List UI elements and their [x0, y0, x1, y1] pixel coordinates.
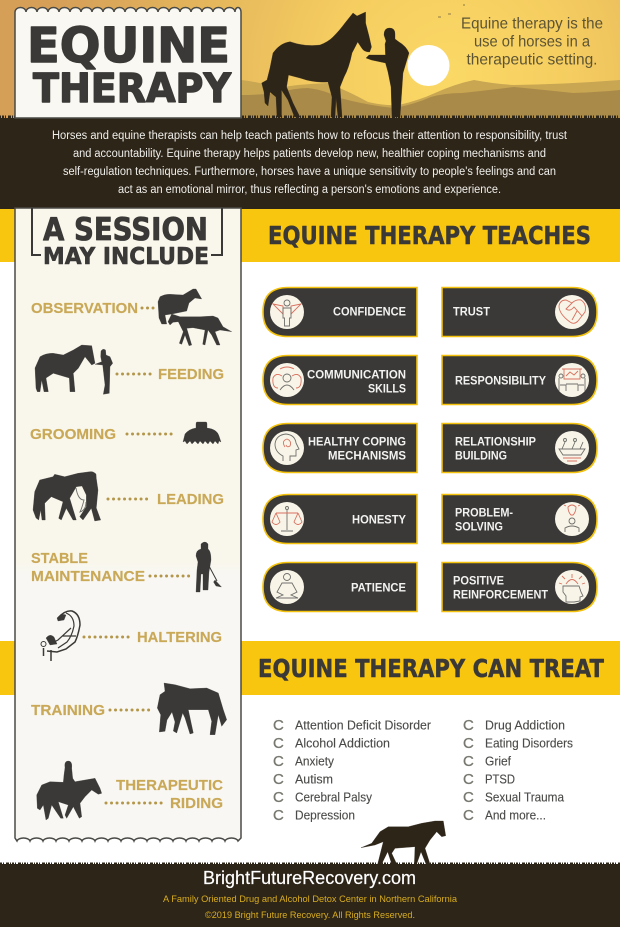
- item: feeding: [35, 345, 224, 394]
- item: grooming: GROOMING: [30, 427, 116, 443]
- header tagline: [461, 16, 603, 68]
- pill: communication skills: [263, 356, 417, 404]
- conditions list: right column: Drug Addiction: [485, 718, 565, 732]
- conditions list: right column: C: [463, 771, 474, 788]
- conditions list: left column: Attention Deficit Disorder: [295, 718, 431, 732]
- intro text band: Horses and equine therapists can help teach patients how to refocus their attention to responsibility, trust: [52, 130, 568, 142]
- pill: relationship building: [442, 424, 597, 472]
- pill: confidence: [263, 288, 417, 336]
- footer horse silhouette: [361, 821, 446, 864]
- item: haltering: [41, 611, 222, 661]
- conditions list: right column: C: [463, 789, 474, 806]
- conditions list: right column: PTSD: [485, 772, 515, 786]
- item: training: TRAINING: [31, 703, 105, 719]
- conditions list: right column: [463, 717, 573, 824]
- pill: relationship building: RELATIONSHIP: [455, 434, 536, 448]
- item: observation: [31, 289, 232, 346]
- birds: [438, 5, 465, 17]
- conditions list: left column: C: [273, 789, 284, 806]
- pill: trust: TRUST: [453, 304, 491, 318]
- pill: healthy coping mechanisms: [263, 424, 417, 472]
- pill: healthy coping mechanisms: MECHANISMS: [328, 448, 406, 462]
- item: stable maintenance: STABLE: [31, 551, 88, 567]
- pill: relationship building: BUILDING: [455, 448, 507, 462]
- item: observation: OBSERVATION: [31, 301, 138, 317]
- intro text band: [0, 117, 620, 209]
- item: leading: LEADING: [157, 492, 224, 508]
- pill: patience: [263, 562, 417, 612]
- footer band: A Family Oriented Drug and Alcohol Detox Center in Northern California: [163, 894, 458, 905]
- pill: healthy coping mechanisms: HEALTHY COPING: [308, 434, 406, 448]
- pill: responsibility: [442, 356, 597, 404]
- conditions list: left column: C: [273, 753, 284, 770]
- title card: THERAPY: [33, 66, 232, 112]
- conditions list: left column: C: [273, 717, 284, 734]
- conditions list: right column: Eating Disorders: [485, 736, 573, 750]
- pill: problem-solving: SOLVING: [455, 520, 503, 534]
- conditions list: left column: Alcohol Addiction: [295, 736, 390, 750]
- near hills: [241, 87, 620, 120]
- footer band: BrightFutureRecovery.com: [203, 868, 416, 888]
- item: stable maintenance: MAINTENANCE: [31, 569, 145, 585]
- footer band: [0, 864, 620, 927]
- conditions list: right column: C: [463, 753, 474, 770]
- item: therapeutic riding: RIDING: [170, 796, 223, 812]
- pill: trust: [442, 288, 597, 336]
- item: stable maintenance: [31, 542, 222, 592]
- panel heading: MAY INCLUDE: [43, 244, 209, 270]
- pill: honesty: HONESTY: [352, 512, 406, 526]
- header horse silhouette: [262, 12, 372, 117]
- sun: [408, 45, 450, 86]
- item: training: [31, 683, 227, 735]
- item: haltering: HALTERING: [137, 630, 222, 646]
- panel heading: [32, 208, 222, 270]
- title card: [15, 8, 241, 118]
- conditions list: right column: Grief: [485, 754, 511, 768]
- conditions list: left column: Anxiety: [295, 754, 335, 768]
- conditions list: right column: C: [463, 717, 474, 734]
- intro text band: and accountability. Equine therapy helps patients develop new, healthier coping mechanisms and: [73, 148, 546, 160]
- conditions list: left column: Cerebral Palsy: [295, 790, 373, 804]
- intro text band: act as an emotional mirror, thus reflecting a person's emotions and experience.: [118, 184, 501, 196]
- header tagline: use of horses in a: [474, 34, 590, 50]
- band: can treat heading: [0, 641, 620, 695]
- pill: communication skills: COMMUNICATION: [307, 368, 406, 382]
- conditions list: left column: Autism: [295, 772, 333, 786]
- header tagline: Equine therapy is the: [461, 16, 603, 32]
- pill: patience: PATIENCE: [351, 580, 406, 594]
- pill: problem-solving: [442, 494, 597, 544]
- header person silhouette: [366, 28, 409, 117]
- pill: responsibility: RESPONSIBILITY: [455, 374, 546, 388]
- conditions list: left column: [273, 717, 431, 824]
- item: leading: [33, 472, 224, 521]
- pill: confidence: CONFIDENCE: [333, 304, 406, 318]
- conditions list: left column: Depression: [295, 808, 355, 822]
- pill: honesty: [263, 494, 417, 544]
- conditions list: right column: Sexual Trauma: [485, 790, 564, 804]
- conditions list: left column: C: [273, 735, 284, 752]
- conditions list: left column: C: [273, 807, 284, 824]
- item: therapeutic riding: THERAPEUTIC: [116, 778, 224, 794]
- pill: communication skills: SKILLS: [368, 382, 406, 396]
- header sunset scene: [0, 0, 620, 120]
- conditions list: left column: C: [273, 771, 284, 788]
- title card: EQUINE: [27, 18, 230, 74]
- conditions list: right column: C: [463, 735, 474, 752]
- pill: problem-solving: PROBLEM-: [455, 506, 513, 520]
- far hills: [241, 80, 620, 120]
- item: grooming: [30, 422, 221, 444]
- panel heading: A SESSION: [43, 212, 208, 248]
- intro text band: self-regulation techniques. Furthermore, horses have a unique sensitivity to people's feelings and can: [63, 166, 556, 178]
- header tagline: therapeutic setting.: [466, 52, 598, 68]
- pill: positive reinforcement: POSITIVE: [453, 574, 504, 588]
- panel: a session may include: [15, 208, 241, 841]
- item: therapeutic riding: [37, 761, 224, 820]
- pill: positive reinforcement: [442, 562, 597, 612]
- conditions list: right column: And more...: [485, 808, 546, 822]
- item: feeding: FEEDING: [158, 367, 224, 383]
- conditions list: right column: C: [463, 807, 474, 824]
- band: teaches heading: [0, 209, 620, 262]
- footer band: ©2019 Bright Future Recovery. All Rights Reserved.: [205, 910, 415, 921]
- pill: positive reinforcement: REINFORCEMENT: [453, 588, 549, 602]
